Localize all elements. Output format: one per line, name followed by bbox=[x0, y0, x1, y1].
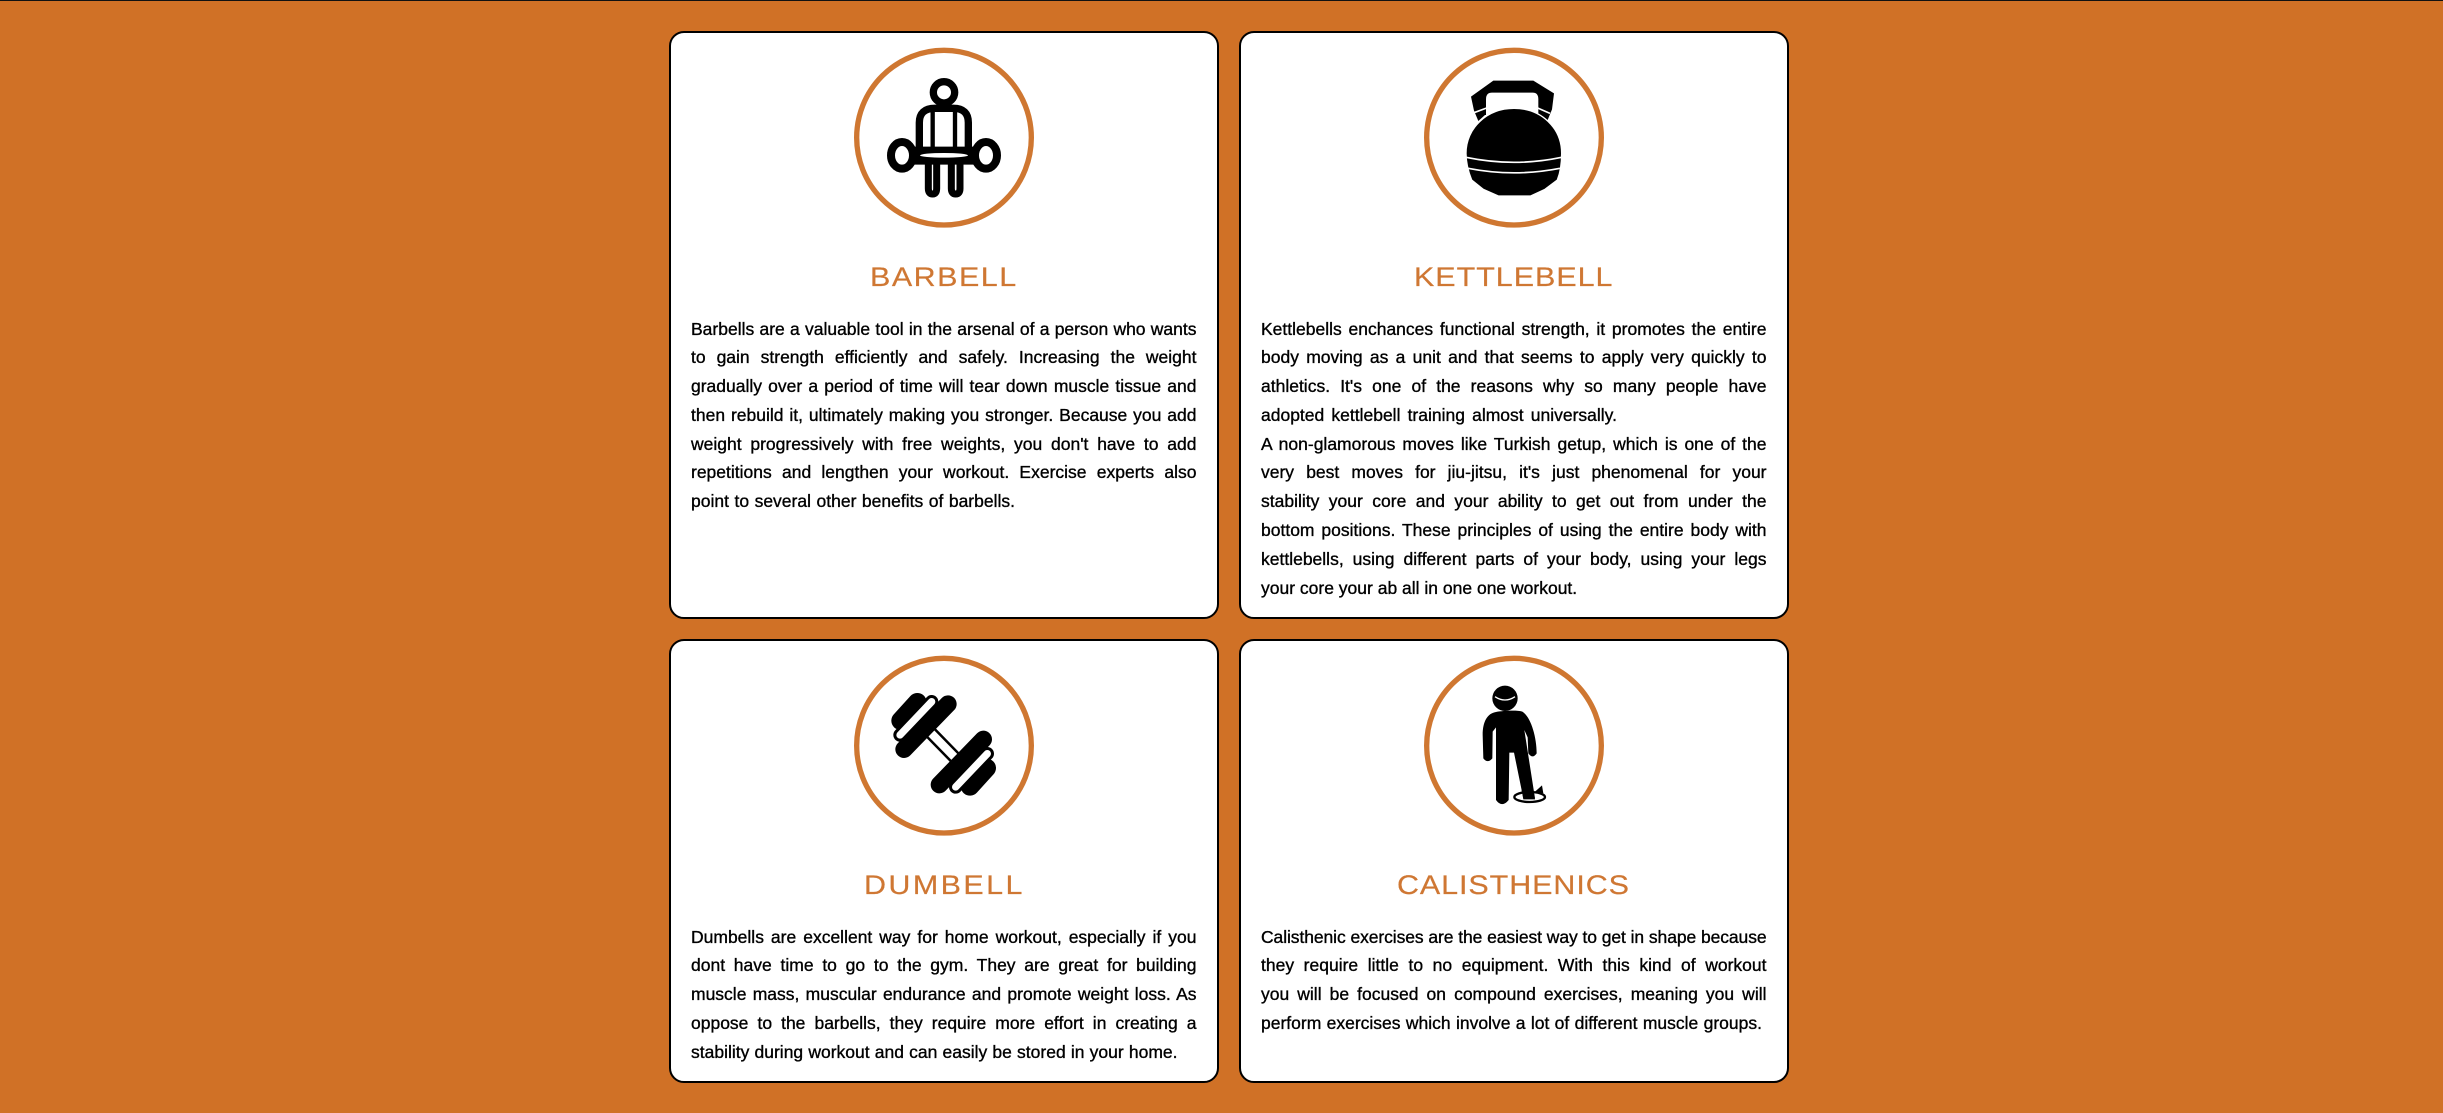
panel: calisthenics bbox=[1239, 639, 1789, 1083]
panel: dumbell bbox=[669, 639, 1219, 1083]
text: kettlebell description bbox=[1260, 318, 1766, 598]
icon: person lifting barbell in circle bbox=[854, 48, 1034, 228]
text: dumbell description: dont have time to go to the gym. They are great for building bbox=[691, 955, 1196, 975]
text: dumbell description: muscle mass, muscular endurance and promote weight loss. As bbox=[691, 984, 1196, 1004]
text: barbell description: weight progressively with free weights, you don't have to add bbox=[691, 434, 1196, 454]
icon: standing person rotating ankle in circle bbox=[1424, 656, 1604, 836]
text: dumbell description: stability during workout and can easily be stored in your home. bbox=[691, 1042, 1178, 1062]
text: kettlebell description: athletics. It's one of the reasons why so many people have bbox=[1261, 376, 1766, 396]
text: kettlebell description: stability your core and your ability to get out from under the bbox=[1261, 491, 1766, 511]
text: barbell description: gradually over a period of time will tear down muscle tissue and bbox=[691, 376, 1196, 396]
text: kettlebell description: A non-glamorous moves like Turkish getup, which is one of the bbox=[1261, 434, 1766, 454]
text: calisthenics description: they require little to no equipment. With this kind of workout bbox=[1261, 955, 1766, 975]
text: dumbell description bbox=[691, 926, 1197, 1062]
text: barbell description: repetitions and lengthen your workout. Exercise experts also bbox=[691, 462, 1196, 482]
heading: dumbell: DUMBELL bbox=[864, 870, 1025, 900]
text: kettlebell description: your core your ab all in one one workout. bbox=[1261, 578, 1577, 598]
icon: dumbbell in circle bbox=[854, 656, 1034, 836]
heading: kettlebell: KETTLEBELL bbox=[1414, 262, 1613, 292]
text: barbell description: point to several other benefits of barbells. bbox=[691, 491, 1015, 511]
text: barbell description: Barbells are a valuable tool in the arsenal of a person who wants bbox=[691, 318, 1196, 338]
heading: calisthenics: CALISTHENICS bbox=[1397, 870, 1630, 900]
text: calisthenics description bbox=[1260, 926, 1767, 1033]
text: barbell description: to gain strength efficiently and safely. Increasing the weight bbox=[691, 347, 1196, 367]
text: calisthenics description: perform exercises which involve a lot of different muscle groups. bbox=[1261, 1013, 1762, 1033]
text: barbell description bbox=[690, 318, 1197, 511]
icon: kettlebell in circle bbox=[1424, 48, 1604, 228]
text: dumbell description: Dumbells are excellent way for home workout, especially if you bbox=[691, 926, 1196, 946]
text: calisthenics description: you will be focused on compound exercises, meaning you will bbox=[1261, 984, 1766, 1004]
panel: kettlebell bbox=[1239, 31, 1789, 619]
text: kettlebell description: bottom positions. These principles of using the entire body with bbox=[1261, 520, 1766, 540]
heading: barbell: BARBELL bbox=[870, 262, 1018, 292]
text: barbell description: then rebuild it, ultimately making you stronger. Because you add bbox=[691, 405, 1196, 425]
text: dumbell description: oppose to the barbells, they require more effort in creating a bbox=[691, 1013, 1196, 1033]
text: kettlebell description: kettlebells, using different parts of your body, using your legs bbox=[1261, 549, 1766, 569]
panel: barbell bbox=[669, 31, 1219, 619]
text: kettlebell description: very best moves for jiu-jitsu, it's just phenomenal for your bbox=[1261, 462, 1766, 482]
text: kettlebell description: Kettlebells enchances functional strength, it promotes the entire bbox=[1261, 318, 1766, 338]
text: kettlebell description: body moving as a unit and that seems to apply very quickly to bbox=[1261, 347, 1766, 367]
text: kettlebell description: adopted kettlebell training almost universally. bbox=[1261, 405, 1617, 425]
text: calisthenics description: Calisthenic exercises are the easiest way to get in shape because bbox=[1261, 926, 1766, 946]
